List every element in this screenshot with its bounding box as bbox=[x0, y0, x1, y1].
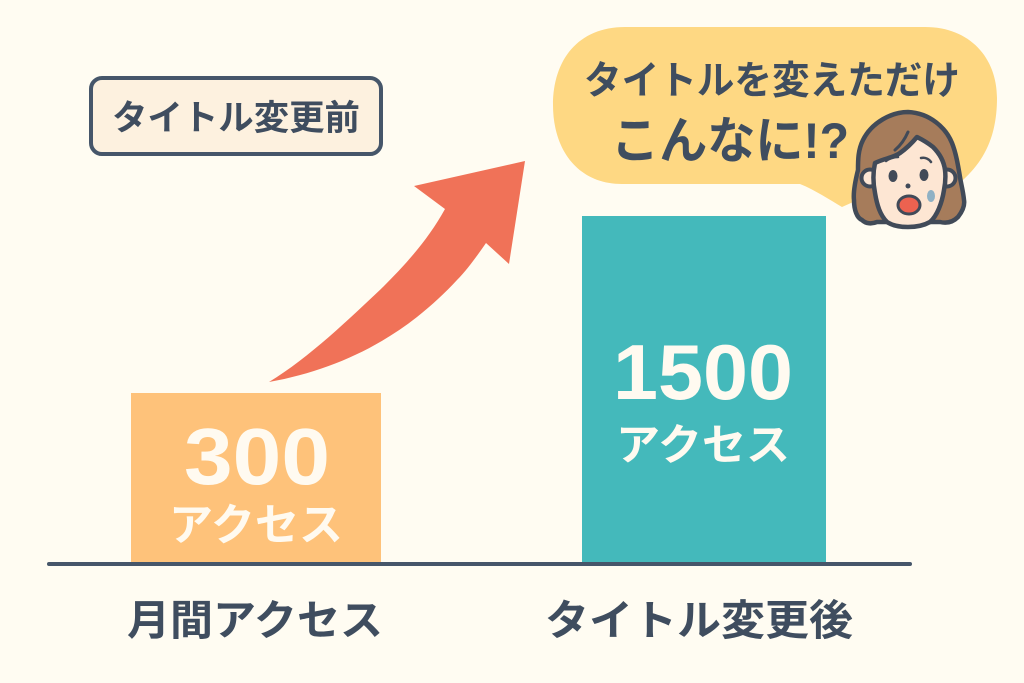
eyes bbox=[888, 170, 898, 182]
nose bbox=[906, 184, 910, 188]
label: before title change: タイトル変更前 bbox=[112, 99, 360, 138]
value 1500: 1500 bbox=[613, 328, 793, 416]
hair bbox=[854, 112, 964, 223]
unit: アクセス bbox=[169, 501, 343, 550]
bubble text line 2: こんなに!? bbox=[611, 113, 849, 169]
bar: after bbox=[582, 216, 826, 563]
bar: before bbox=[131, 393, 381, 563]
arrow bbox=[269, 161, 525, 382]
value 300: 300 bbox=[184, 412, 330, 501]
face bbox=[874, 137, 945, 227]
sweat drop bbox=[927, 190, 935, 202]
label: before title change bbox=[91, 78, 381, 154]
axis label: after title change: タイトル変更後 bbox=[545, 597, 853, 644]
axis line bbox=[47, 562, 912, 566]
icon: surprised woman bbox=[854, 112, 964, 227]
axis label: monthly access: 月間アクセス bbox=[127, 597, 383, 644]
speech bubble bbox=[553, 27, 997, 207]
hair strand bbox=[895, 132, 908, 150]
eyebrows bbox=[886, 157, 931, 162]
ears bbox=[862, 170, 878, 186]
mouth bbox=[898, 196, 920, 214]
unit: アクセス bbox=[616, 422, 790, 470]
bubble text line 1: タイトルを変えただけ bbox=[584, 60, 960, 103]
